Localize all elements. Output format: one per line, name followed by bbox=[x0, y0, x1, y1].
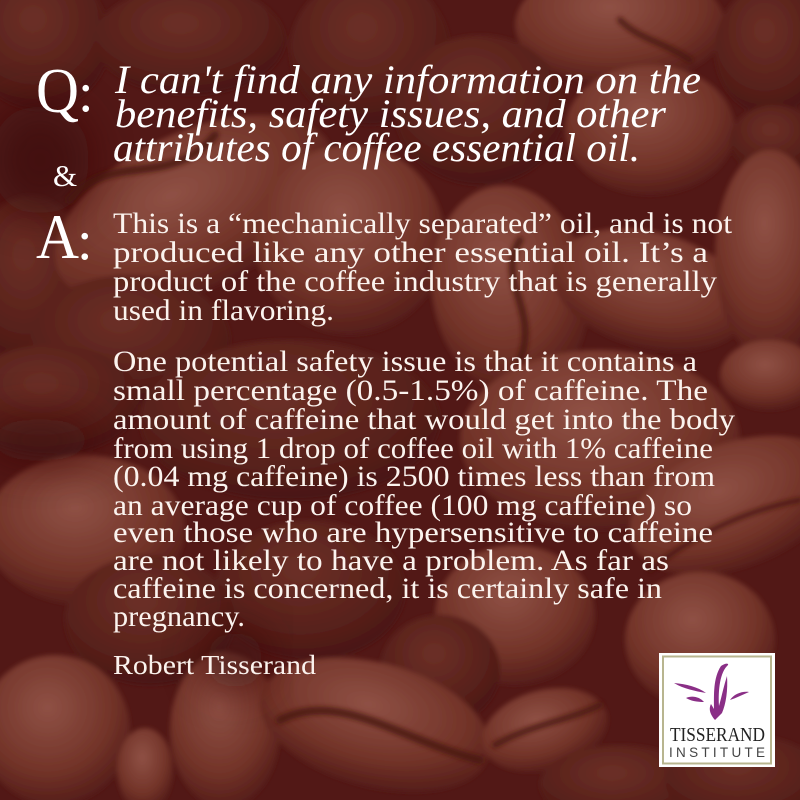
answer paragraph two: are not likely to have a problem. As far as bbox=[113, 545, 669, 577]
question heading: attributes of coffee essential oil. bbox=[113, 125, 640, 170]
Q marker: Q bbox=[36, 55, 79, 126]
answer paragraph one: This is a “mechanically separated” oil, and is not bbox=[113, 208, 733, 240]
icon: purple plant bbox=[674, 664, 749, 720]
logo wordmark: TISSERAND bbox=[670, 724, 765, 746]
answer paragraph one: product of the coffee industry that is generally bbox=[113, 266, 717, 298]
answer paragraph two: pregnancy. bbox=[113, 601, 245, 633]
answer paragraph one: used in flavoring. bbox=[113, 295, 334, 327]
answer paragraph two: from using 1 drop of coffee oil with 1% caffeine bbox=[113, 433, 713, 465]
answer paragraph one: produced like any other essential oil. It’s a bbox=[113, 237, 708, 269]
answer paragraph two: amount of caffeine that would get into the body bbox=[113, 404, 735, 436]
answer paragraph two: an average cup of coffee (100 mg caffeine) so bbox=[113, 490, 692, 522]
ampersand: & bbox=[53, 158, 77, 193]
answer paragraph two: even those who are hypersensitive to caffeine bbox=[113, 517, 713, 549]
Q colon: : bbox=[78, 62, 94, 124]
answer paragraph two: caffeine is concerned, it is certainly safe in bbox=[113, 573, 662, 605]
answer paragraph two: small percentage (0.5-1.5%) of caffeine. The bbox=[113, 375, 708, 407]
A marker: A bbox=[36, 201, 79, 272]
question heading: I can't find any information on the bbox=[114, 57, 701, 102]
logo subtitle: INSTITUTE bbox=[669, 745, 765, 760]
question heading: benefits, safety issues, and other bbox=[115, 91, 666, 136]
answer paragraph two: One potential safety issue is that it contains a bbox=[113, 346, 697, 378]
answer paragraph two: (0.04 mg caffeine) is 2500 times less than from bbox=[113, 461, 715, 493]
author name: Robert Tisserand bbox=[113, 650, 317, 680]
A colon: : bbox=[77, 210, 93, 272]
